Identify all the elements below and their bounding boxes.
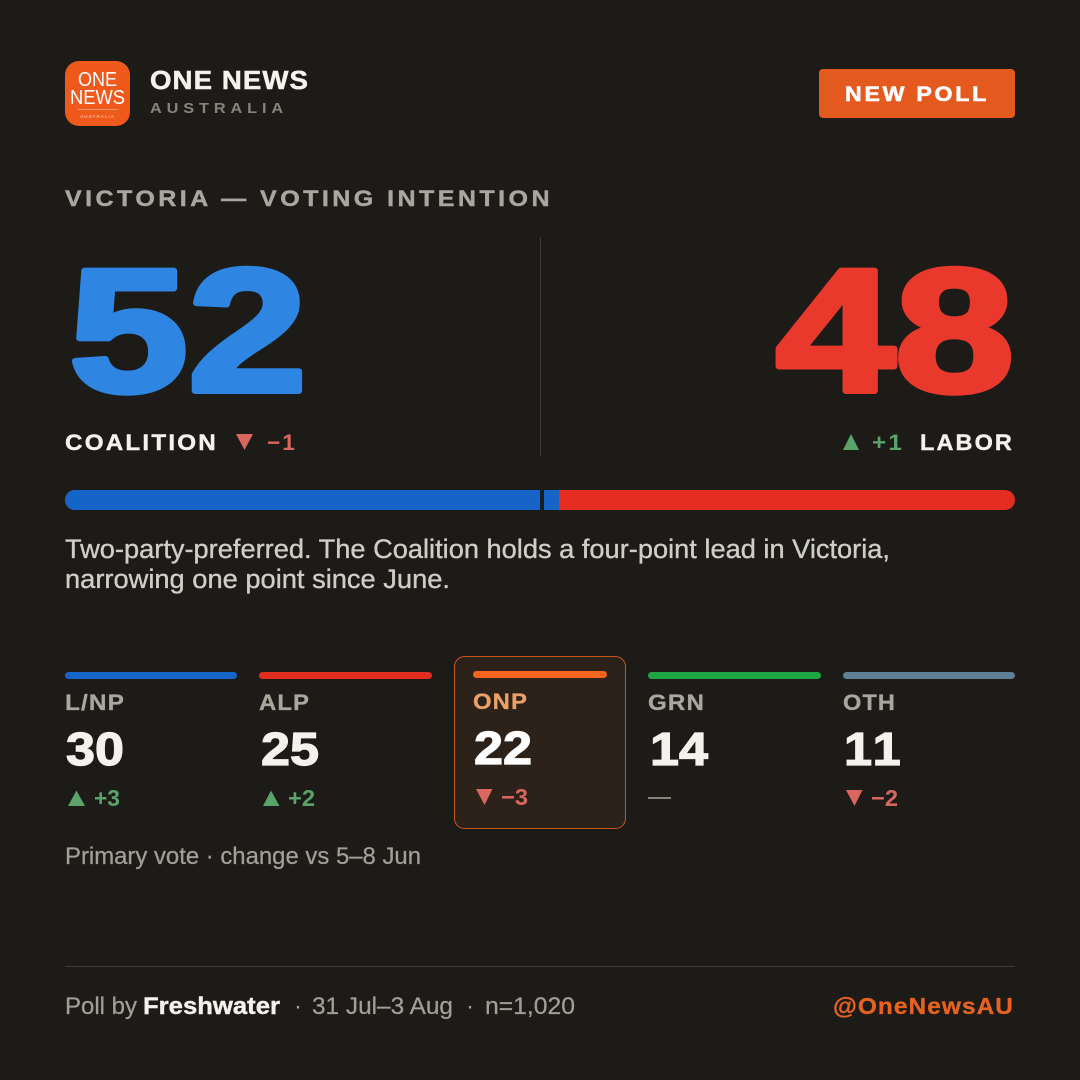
primary vote: OTH: 11 xyxy=(844,723,904,775)
coalition label: COALITION xyxy=(65,430,218,455)
two-party-preferred bar xyxy=(65,490,1015,510)
footer source: Freshwater xyxy=(143,993,280,1020)
coalition change: −1 xyxy=(267,430,297,455)
primary vote note: Primary vote · change vs 5–8 Jun xyxy=(65,843,421,870)
icon: One News logo: NEWS xyxy=(70,87,125,109)
primary vote: OTH: −2 xyxy=(871,785,898,811)
icon: down arrow xyxy=(236,434,253,450)
primary vote: GRN: GRN xyxy=(648,690,705,715)
new poll badge xyxy=(819,69,1015,118)
description xyxy=(65,534,890,594)
centre divider xyxy=(540,237,541,456)
footer source: · xyxy=(466,993,474,1020)
primary vote: ONP highlight card: 22 xyxy=(474,722,532,774)
footer source: · xyxy=(294,993,302,1020)
primary vote: GRN: 14 xyxy=(650,723,708,775)
brand subtitle: AUSTRALIA xyxy=(150,100,288,117)
footer rule xyxy=(65,966,1015,967)
social handle: @OneNewsAU xyxy=(833,993,1014,1019)
new poll badge: NEW POLL xyxy=(845,83,989,106)
primary vote: ONP highlight card: ONP xyxy=(473,689,528,714)
primary vote: ALP: 25 xyxy=(261,723,319,775)
header brand xyxy=(65,61,309,126)
icon: One News logo: ONE xyxy=(78,69,117,91)
primary vote: L/NP: 30 xyxy=(66,723,124,775)
primary vote: L/NP xyxy=(65,672,237,811)
icon: One News logo xyxy=(65,61,130,126)
footer source: 31 Jul–3 Aug xyxy=(312,993,453,1020)
coalition result xyxy=(65,234,307,455)
primary vote: ONP highlight card: −3 xyxy=(501,784,528,810)
icon: One News logo: AUSTRALIA xyxy=(80,114,115,119)
coalition 52: 52 xyxy=(69,234,307,429)
labor change: +1 xyxy=(872,430,904,455)
section heading: VICTORIA — VOTING INTENTION xyxy=(65,186,553,211)
primary vote: L/NP: +3 xyxy=(94,785,120,811)
primary vote: L/NP: L/NP xyxy=(65,690,125,715)
brand name: ONE NEWS xyxy=(150,65,309,95)
primary vote: ONP highlight card xyxy=(454,656,626,828)
description: Two-party-preferred. The Coalition holds a four-point lead in Victoria, xyxy=(65,534,890,564)
primary vote: ALP: ALP xyxy=(259,690,310,715)
primary vote: OTH: OTH xyxy=(843,690,896,715)
footer source: n=1,020 xyxy=(485,993,575,1020)
labor label: LABOR xyxy=(920,430,1014,455)
primary vote: OTH xyxy=(843,672,1015,811)
labor 48: 48 xyxy=(776,234,1014,429)
primary vote: ALP: +2 xyxy=(288,785,315,811)
labor result xyxy=(776,234,1014,455)
primary vote: GRN xyxy=(648,672,821,799)
footer source: Poll by xyxy=(65,993,137,1020)
footer source xyxy=(65,993,575,1020)
description: narrowing one point since June. xyxy=(65,564,450,594)
icon: up arrow xyxy=(843,434,859,450)
primary vote: ALP xyxy=(259,672,432,811)
